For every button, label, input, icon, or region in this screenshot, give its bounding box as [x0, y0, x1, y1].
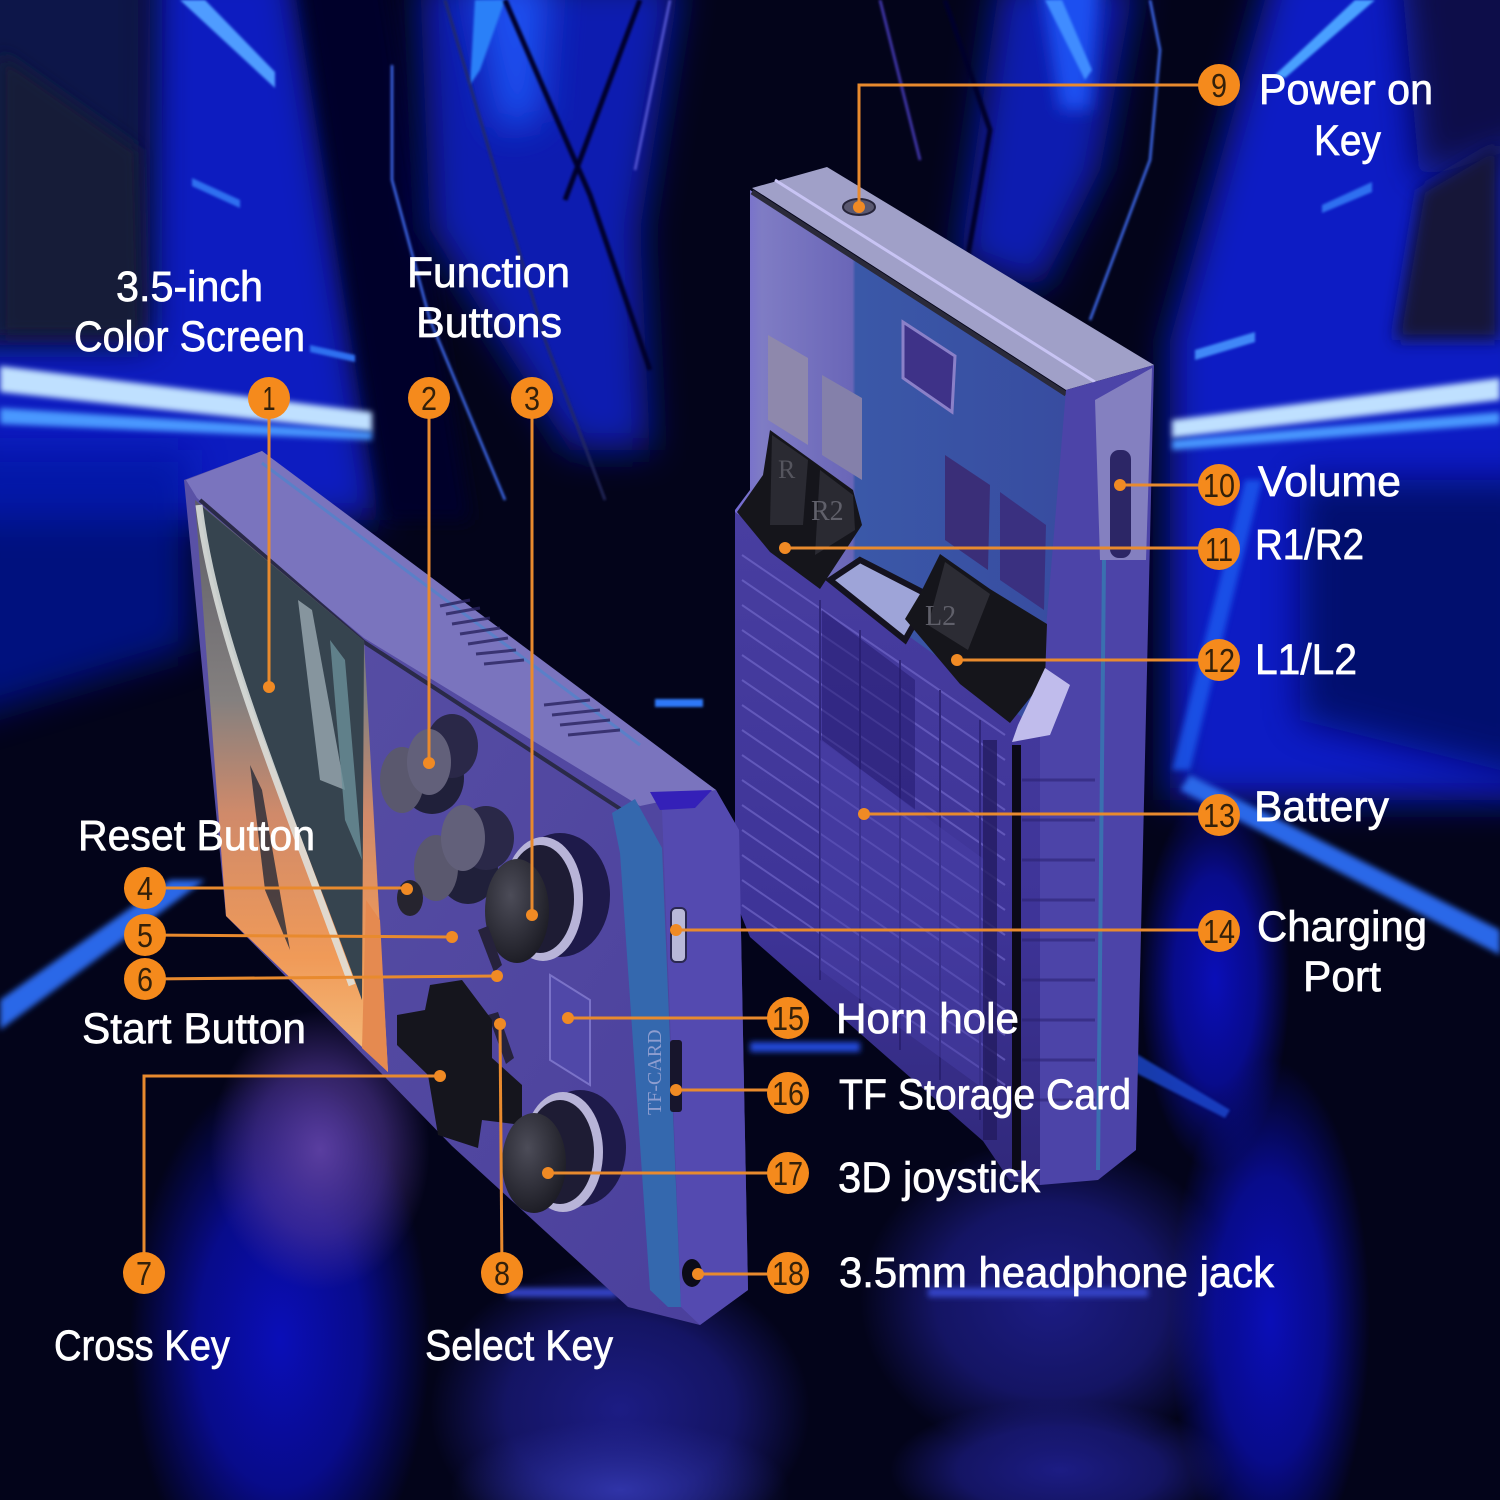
top rim: [186, 451, 716, 806]
TF card slot: [670, 1040, 682, 1112]
labels: 3.5mm headphone jack: [839, 1249, 1274, 1297]
left joystick: [502, 1090, 626, 1213]
number badges: 12: [1203, 642, 1235, 679]
chip and board components: [768, 322, 1046, 610]
number badges: 6: [137, 961, 153, 998]
labels: Power on: [1259, 66, 1433, 114]
labels: Color Screen: [74, 313, 305, 361]
number badges: 4: [137, 870, 153, 907]
top edge of right device: [752, 167, 1154, 390]
labels: Battery: [1254, 783, 1389, 831]
labels: Cross Key: [54, 1322, 230, 1370]
number badges: 7: [136, 1255, 152, 1292]
upper back panel: [735, 190, 1070, 740]
number badges: 11: [1205, 531, 1233, 568]
blue side stripe: [612, 799, 681, 1307]
number badges: 14: [1203, 913, 1235, 950]
number badges: 10: [1203, 467, 1235, 504]
number badges: 9: [1211, 67, 1227, 104]
right device: back view: [735, 167, 1154, 1185]
labels: Horn hole: [836, 995, 1019, 1043]
game screen: [195, 500, 388, 1072]
number badges: 2: [421, 380, 437, 417]
number badges: 17: [773, 1155, 803, 1192]
corridor edge lines: [392, 0, 1160, 500]
labels: 3D joystick: [838, 1154, 1040, 1202]
labels: Function: [407, 249, 570, 297]
labels: Select Key: [425, 1322, 613, 1370]
labels: 3.5-inch: [116, 263, 263, 311]
R1/R2 triggers: [737, 430, 862, 589]
headphone jack: [682, 1259, 702, 1287]
number badges: 16: [772, 1075, 804, 1112]
R1/R2 triggers: R2: [811, 496, 844, 527]
lower body: [735, 512, 1040, 1185]
labels: Reset Button: [78, 812, 315, 860]
labels: Volume: [1258, 458, 1401, 506]
right joystick: [485, 833, 610, 963]
number badges: 15: [772, 1000, 804, 1037]
number badges: [123, 64, 1240, 1294]
labels: Buttons: [416, 299, 562, 347]
floor glow: [130, 790, 1370, 1500]
side edge of right device: [1040, 365, 1154, 1185]
dark battery cell: [822, 610, 915, 810]
TF label: TF-CARD: [644, 1029, 666, 1115]
labels: Start Button: [82, 1005, 306, 1053]
vent slots: [440, 600, 620, 735]
labels: R1/R2: [1255, 521, 1364, 569]
left device: front view: [184, 451, 748, 1325]
number badges: 8: [494, 1255, 510, 1292]
labels: TF Storage Card: [839, 1071, 1131, 1119]
number badges: 5: [137, 917, 153, 954]
number badges: 18: [772, 1255, 804, 1292]
number badges: 13: [1203, 797, 1235, 834]
speaker slot panel: [550, 975, 590, 1085]
volume rocker: [1110, 450, 1131, 558]
menu slots: [478, 926, 502, 972]
battery ribs: [742, 555, 1095, 1120]
leader lines: [144, 85, 1219, 1280]
labels: Key: [1314, 117, 1381, 165]
R1/R2 triggers: R: [778, 455, 796, 484]
number badges: 3: [524, 380, 540, 417]
right side panel: [662, 790, 748, 1325]
USB port: [671, 908, 686, 962]
number badges: 1: [262, 380, 276, 417]
labels: Charging: [1257, 903, 1427, 951]
center roller: [830, 560, 930, 640]
reset button: [397, 880, 423, 916]
L1/L2 triggers: [905, 554, 1047, 723]
face buttons: [380, 714, 514, 904]
L1/L2 triggers: L2: [925, 601, 956, 632]
cross key: [397, 980, 522, 1148]
labels: Port: [1303, 953, 1381, 1001]
power key: [843, 199, 875, 215]
labels: [54, 66, 1433, 1370]
white corner highlight: [1012, 668, 1070, 742]
labels: L1/L2: [1255, 636, 1357, 684]
